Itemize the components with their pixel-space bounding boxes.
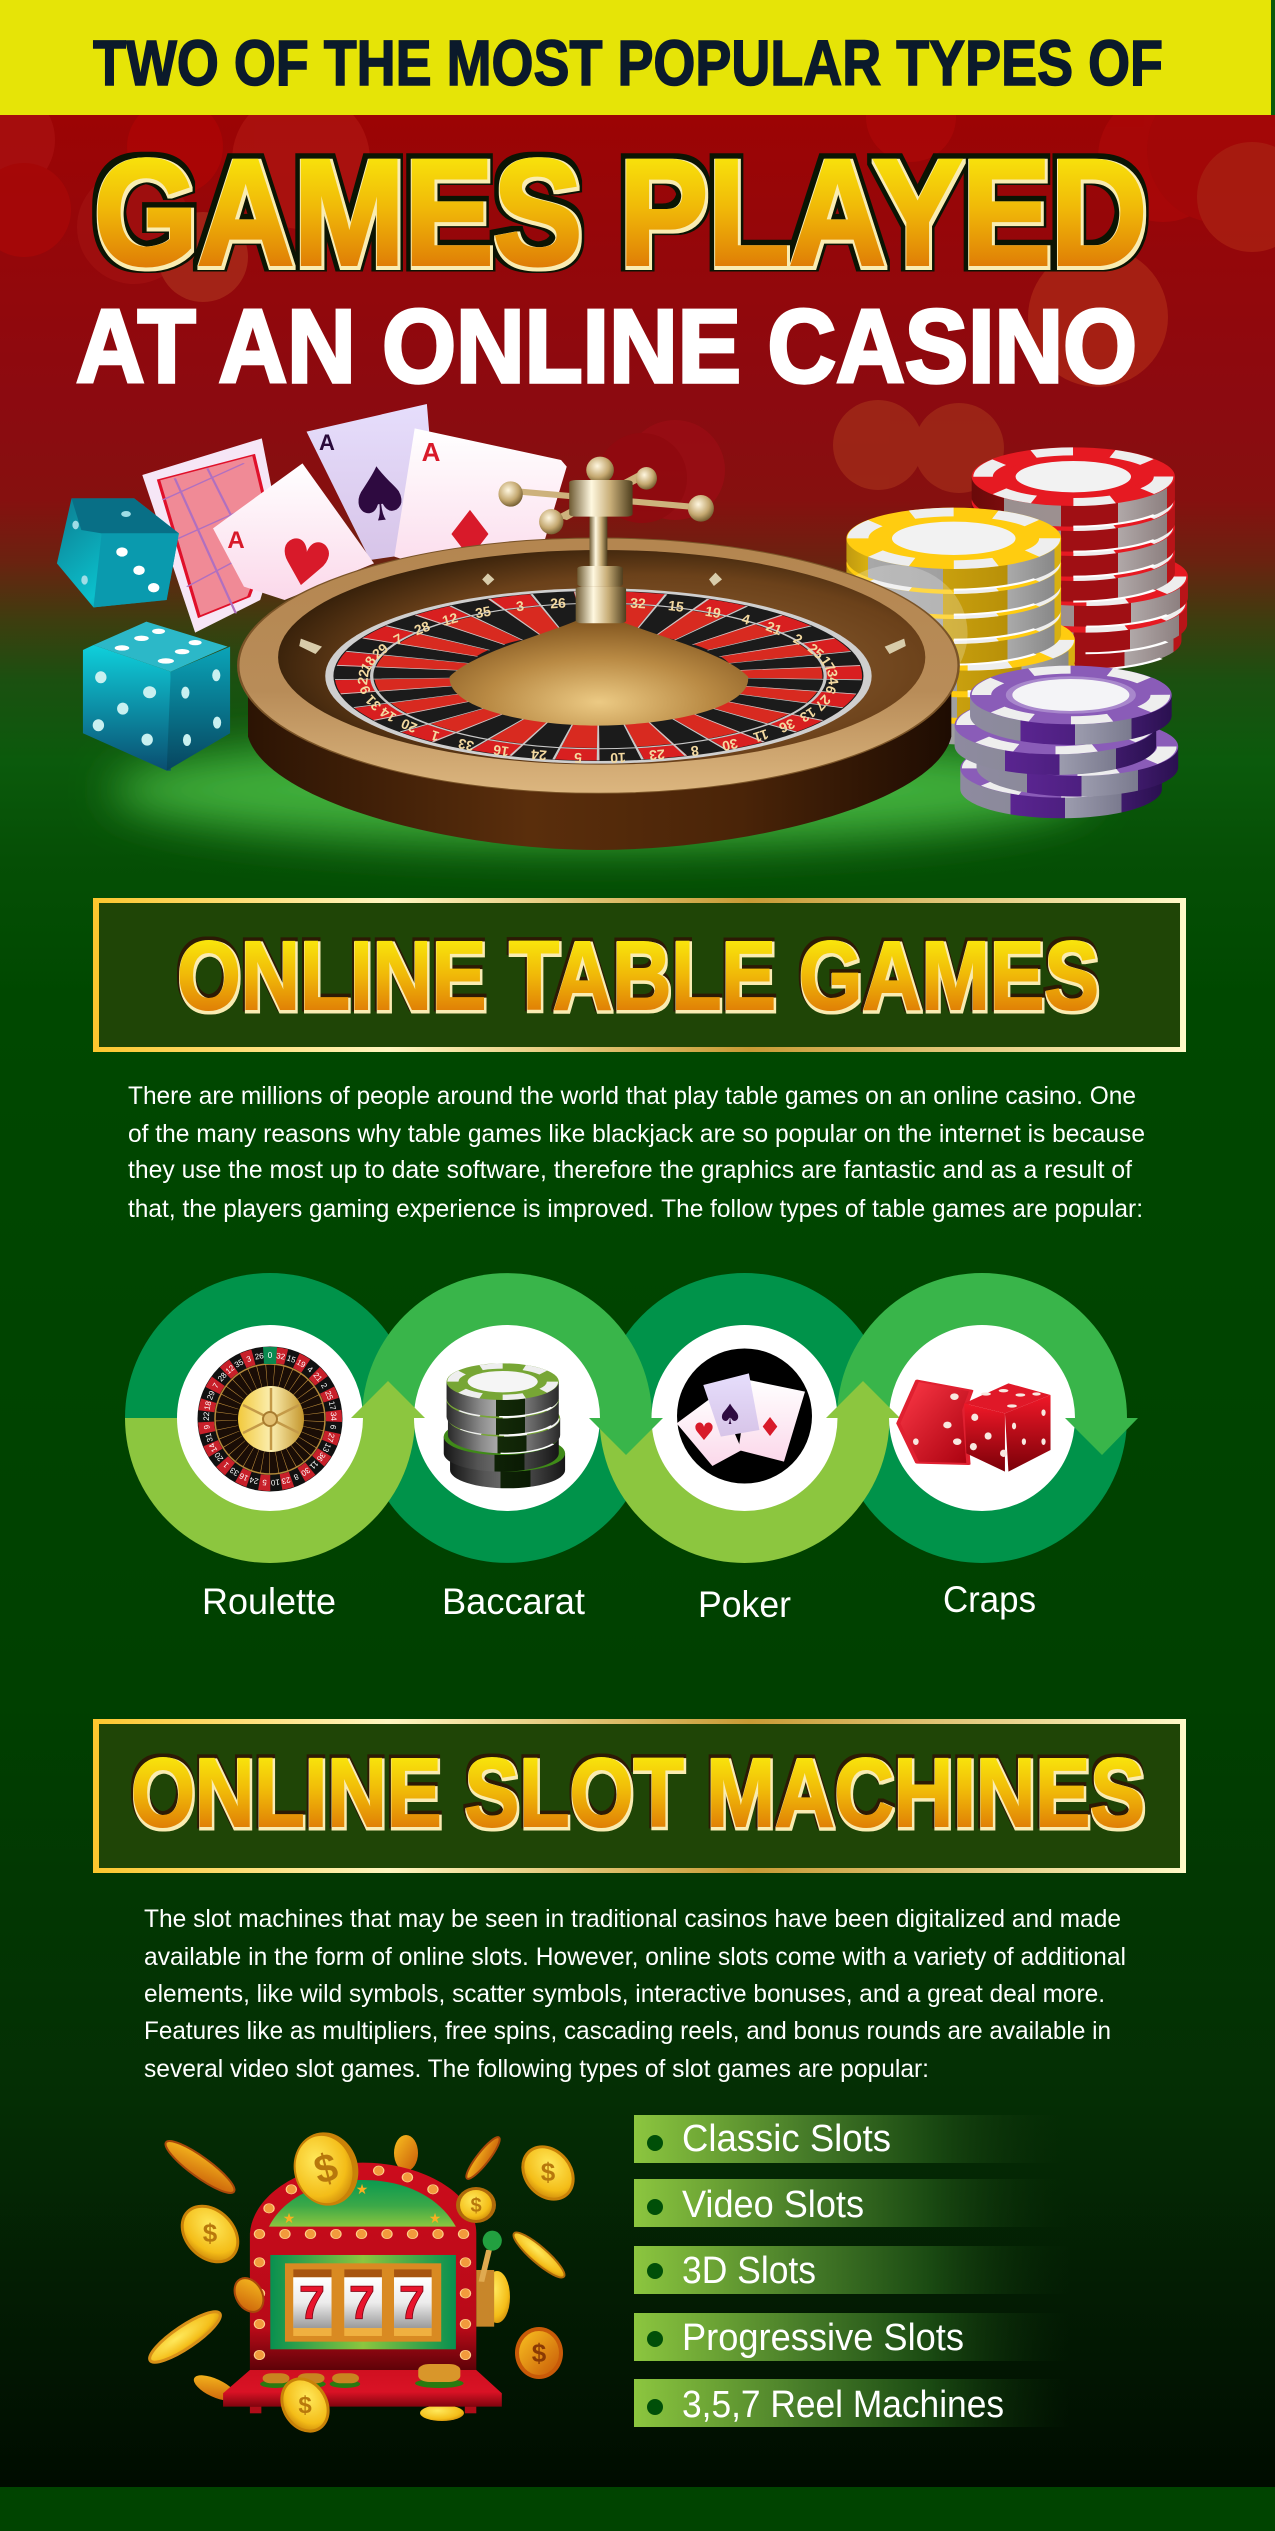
flying coins: $ — [532, 2338, 547, 2368]
roulette wheel numbers: 36 — [776, 716, 797, 737]
icon: playing card back — [142, 438, 281, 633]
list item: video slots — [634, 2179, 1070, 2227]
decorative red bubbles — [0, 72, 1275, 523]
roulette icon numbers: 17 — [327, 1400, 338, 1411]
list item: 3d slots — [634, 2246, 1070, 2294]
icon: baccarat chips — [444, 1363, 565, 1488]
flying coins: $ — [541, 2157, 556, 2187]
roulette wheel numbers: 26 — [550, 595, 566, 611]
wheel cone — [450, 608, 748, 726]
label: baccarat: Baccarat — [442, 1581, 586, 1622]
list item: classic slots: Classic Slots — [682, 2118, 891, 2160]
card letters and suits — [227, 430, 500, 605]
roulette wheel numbers: 1 — [429, 727, 441, 745]
roulette icon numbers: 4 — [305, 1365, 315, 1375]
title: at an online casino: AT AN ONLINE CASINO — [76, 289, 1137, 405]
reels showing 777: 7 — [299, 2276, 325, 2329]
list item: 3d slots: 3D Slots — [682, 2250, 816, 2292]
roulette icon numbers: 26 — [254, 1351, 265, 1362]
list item: reel machines: 3,5,7 Reel Machines — [682, 2384, 1004, 2426]
wheel rim — [238, 538, 959, 793]
arrow: up to craps — [826, 1381, 900, 1418]
roulette wheel numbers: 15 — [667, 597, 685, 615]
roulette wheel numbers: 25 — [805, 640, 827, 662]
card letters and suits: ♠ — [342, 449, 417, 541]
list item: progressive slots — [634, 2313, 1070, 2361]
section heading: online table games — [93, 898, 1186, 1052]
roulette icon numbers: 24 — [248, 1475, 259, 1486]
roulette wheel numbers: 29 — [369, 640, 391, 662]
roulette icon numbers: 33 — [228, 1465, 241, 1478]
roulette wheel numbers: 5 — [574, 750, 582, 766]
heading text: ONLINE TABLE GAMES — [177, 921, 1099, 1030]
table games circular flow — [125, 1273, 1138, 1625]
slot machines paragraph: several video slot games. The following types of slot games are popular: — [144, 2055, 929, 2083]
roulette wheel numbers: 19 — [704, 603, 722, 621]
flying coins: $ — [310, 2145, 342, 2193]
roulette icon numbers: 31 — [204, 1432, 215, 1443]
list item: reel machines — [634, 2379, 1070, 2427]
roulette icon numbers: 3 — [245, 1354, 253, 1364]
list item: progressive slots: Progressive Slots — [682, 2317, 964, 2359]
list: slot game types — [634, 2115, 1070, 2427]
wheel spindle — [498, 457, 714, 623]
icon: dark teal die — [57, 498, 179, 607]
roulette icon numbers: 11 — [307, 1459, 320, 1471]
roulette icon numbers: 9 — [202, 1424, 212, 1430]
roulette wheel numbers: 24 — [530, 746, 547, 764]
flying coins — [144, 2125, 586, 2442]
wheel centre cone, spindle and purple chips — [450, 457, 1178, 818]
icon: poker cards: ♠ — [717, 1398, 743, 1431]
roulette wheel numbers: 9 — [356, 683, 374, 697]
roulette icon numbers: 22 — [202, 1411, 211, 1421]
ball deflectors — [299, 573, 906, 654]
arrow: up to baccarat — [351, 1381, 425, 1418]
roulette wheel numbers: 28 — [412, 618, 432, 638]
card letters and suits: A — [227, 527, 245, 554]
roulette icon numbers: 36 — [314, 1451, 327, 1463]
list item: classic slots — [634, 2115, 1070, 2163]
roulette icon numbers: 6 — [328, 1424, 338, 1430]
roulette wheel numbers: 12 — [440, 609, 460, 629]
slot machines paragraph: Features like as multipliers, free spins, cascading reels, and bonus rounds are available in — [144, 2017, 1111, 2045]
roulette wheel numbers — [354, 595, 842, 766]
arrow: down at end — [1065, 1418, 1138, 1455]
icon: craps dice — [898, 1381, 1051, 1472]
hero: dice, cards and chip stacks — [57, 404, 1188, 771]
table games paragraph — [128, 1082, 1145, 1223]
roulette wheel numbers: 30 — [720, 735, 739, 755]
icon: slot machine with coins — [144, 2125, 586, 2442]
title: games played: GAMES PLAYED — [94, 128, 1147, 296]
roulette wheel numbers: 32 — [630, 595, 646, 611]
wheel base — [248, 687, 951, 850]
roulette wheel numbers: 20 — [398, 715, 419, 736]
roulette icon numbers: 18 — [203, 1400, 213, 1411]
table games paragraph: There are millions of people around the world that play table games on an online casino. One — [128, 1082, 1136, 1110]
slot machines paragraph: available in the form of online slots. However, online slots come with a variety of additional — [144, 1943, 1126, 1971]
roulette icon numbers: 5 — [261, 1478, 267, 1487]
icon: roulette wheel — [198, 1346, 342, 1492]
roulette icon numbers: 27 — [325, 1432, 336, 1444]
roulette wheel numbers: 3 — [515, 598, 525, 614]
roulette icon numbers: 34 — [329, 1412, 338, 1421]
roulette wheel numbers: 33 — [456, 735, 475, 755]
roulette wheel body — [238, 538, 959, 850]
roulette wheel numbers: 2 — [791, 630, 805, 648]
slot machines paragraph: elements, like wild symbols, scatter symbols, interactive bonuses, and a great deal more. — [144, 1980, 1105, 2008]
roulette wheel numbers: 23 — [648, 746, 665, 764]
label: poker: Poker — [698, 1584, 791, 1625]
table games paragraph: of the many reasons why table games like blackjack are so popular on the internet is because — [128, 1120, 1145, 1148]
icon: purple chip stack — [955, 666, 1178, 818]
roulette icon numbers: 21 — [311, 1371, 324, 1384]
roulette icon numbers: 35 — [233, 1357, 246, 1370]
roulette wheel numbers: 10 — [610, 750, 626, 766]
roulette wheel numbers: 13 — [797, 704, 819, 726]
list item: video slots: Video Slots — [682, 2184, 864, 2226]
roulette wheel numbers: 31 — [362, 692, 384, 714]
roulette icon numbers: 1 — [221, 1460, 231, 1470]
icon: ace of hearts card — [213, 463, 374, 600]
slot machines paragraph — [144, 1905, 1126, 2083]
coins behind machine — [190, 2135, 510, 2421]
roulette icon numbers: 30 — [299, 1465, 312, 1478]
roulette icon numbers: 2 — [319, 1381, 329, 1390]
reels showing 777: 7 — [399, 2276, 425, 2329]
roulette icon numbers: 15 — [285, 1353, 297, 1365]
roulette wheel numbers: 35 — [474, 603, 492, 621]
roulette wheel numbers: 34 — [824, 668, 842, 686]
card letters and suits: A — [422, 437, 441, 467]
roulette icon numbers: 12 — [224, 1363, 237, 1376]
icon: light teal die — [83, 622, 230, 771]
card letters and suits: A — [319, 430, 335, 455]
icon: poker cards: ♦ — [758, 1413, 782, 1443]
roulette wheel numbers: 6 — [822, 683, 840, 697]
roulette wheel numbers: 17 — [817, 653, 839, 675]
roulette icon numbers: 16 — [237, 1471, 250, 1483]
roulette icon numbers: 7 — [211, 1381, 221, 1390]
arrow: down to poker — [589, 1418, 663, 1455]
roulette wheel numbers: 14 — [377, 704, 399, 726]
roulette wheel numbers: 27 — [812, 692, 834, 714]
roulette wheel numbers: 18 — [357, 653, 379, 675]
roulette wheel numbers: 4 — [740, 610, 752, 628]
roulette icon numbers: 0 — [268, 1351, 273, 1360]
section heading: online slot machines — [93, 1719, 1186, 1873]
roulette icon numbers: 20 — [212, 1450, 225, 1463]
icon: poker cards — [677, 1348, 812, 1484]
roulette icon numbers — [202, 1351, 338, 1487]
flying coins: $ — [203, 2218, 218, 2248]
stars on dome — [283, 2181, 441, 2226]
roulette icon numbers: 8 — [292, 1472, 300, 1482]
roulette wheel numbers: 11 — [751, 726, 771, 746]
icon: ace of diamonds card — [394, 428, 567, 587]
roulette icon numbers: 19 — [295, 1357, 308, 1370]
roulette wheel numbers: 22 — [354, 668, 372, 686]
roulette icon numbers: 28 — [216, 1370, 229, 1383]
roulette icon numbers: 29 — [205, 1389, 217, 1401]
roulette wheel numbers: 8 — [690, 742, 700, 760]
table games paragraph: that, the players gaming experience is improved. The follow types of table games are popular: — [128, 1195, 1143, 1223]
footer band — [0, 2487, 1275, 2531]
machine body — [223, 2163, 502, 2413]
stars on dome: ★ — [283, 2210, 295, 2226]
card letters and suits: ♥ — [271, 523, 338, 605]
table games paragraph: they use the most up to date software, therefore the graphics are fantastic and as a result of — [128, 1156, 1132, 1184]
icon: ace of spades card — [307, 404, 439, 560]
roulette icon numbers: 13 — [320, 1442, 333, 1454]
roulette icon numbers: 23 — [280, 1475, 291, 1486]
flying coins: $ — [470, 2195, 482, 2217]
slot machines paragraph: The slot machines that may be seen in traditional casinos have been digitalized and made — [144, 1905, 1121, 1933]
green glow behind wheel — [110, 735, 1090, 845]
card letters and suits: ♦ — [440, 497, 500, 574]
icon: poker cards: ♥ — [693, 1418, 715, 1446]
stars on dome: ★ — [429, 2210, 441, 2226]
wheel bowl — [278, 550, 925, 765]
icon: yellow chip stack — [846, 508, 1075, 745]
roulette icon numbers: 10 — [270, 1477, 280, 1487]
reels showing 777 — [299, 2276, 425, 2329]
number ring — [325, 588, 872, 764]
title band — [0, 0, 1275, 115]
roulette wheel numbers: 7 — [391, 630, 405, 648]
flow rings — [125, 1273, 1127, 1563]
label: craps: Craps — [943, 1579, 1036, 1620]
reels showing 777: 7 — [349, 2276, 375, 2329]
roulette icon numbers: 14 — [207, 1441, 219, 1454]
glass highlight over yellow chips — [821, 565, 968, 702]
roulette icon numbers: 32 — [276, 1351, 286, 1362]
icon: red chip stack — [972, 447, 1188, 670]
stars on dome: ★ — [356, 2181, 368, 2197]
roulette icon numbers: 25 — [323, 1390, 335, 1402]
roulette wheel numbers: 21 — [764, 618, 784, 638]
flying coins: $ — [298, 2392, 312, 2419]
roulette wheel numbers: 16 — [492, 742, 510, 760]
label: roulette: Roulette — [202, 1581, 336, 1622]
